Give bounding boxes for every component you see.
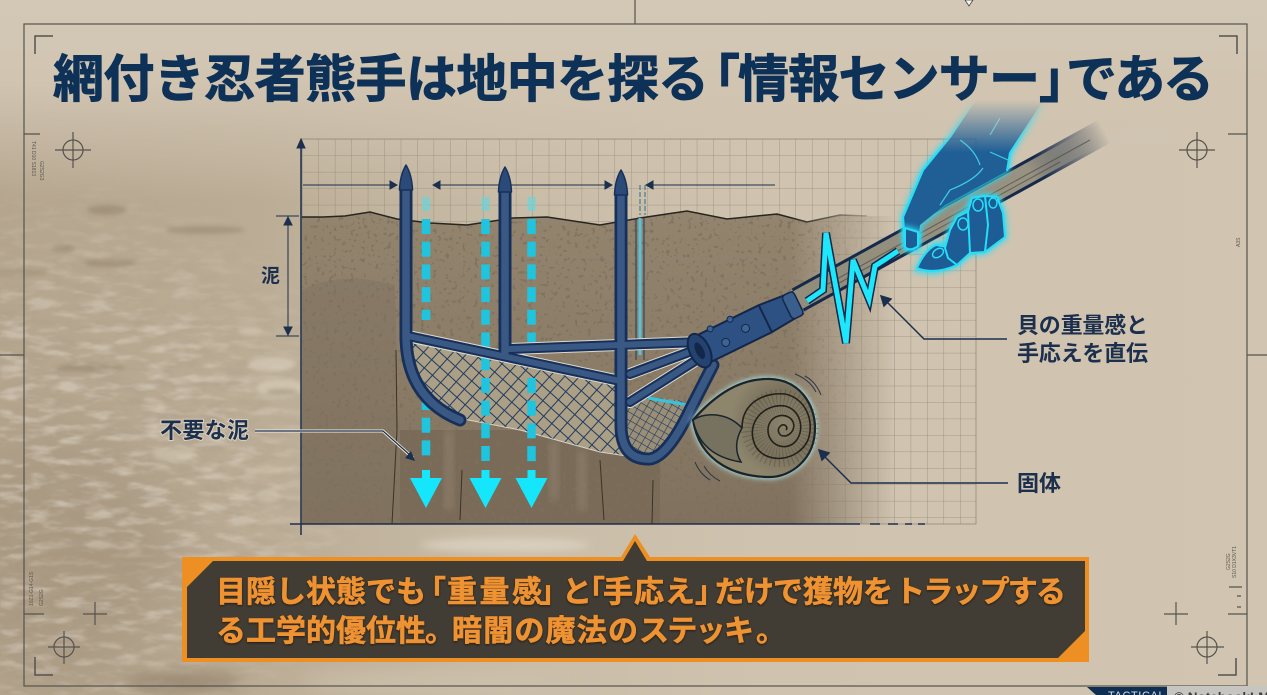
callout panel: 」 <box>695 576 725 609</box>
callout panel: ステッキ <box>639 615 754 648</box>
label: solid: 固体 <box>1017 471 1061 496</box>
callout panel <box>182 534 1089 662</box>
icon: vibration zigzag <box>807 233 898 343</box>
dimension arrows <box>303 181 775 189</box>
grid background <box>302 139 976 524</box>
icon: mouse cursor <box>965 0 973 6</box>
label: mud: 泥 <box>261 265 280 287</box>
label: unnecessary mud: 不要な泥 <box>160 418 249 443</box>
margin micro text: G2S2G <box>39 589 45 606</box>
callout panel: 目隠し状態でも <box>216 576 426 609</box>
icon: snail shell <box>693 374 821 481</box>
collar joint <box>683 286 806 371</box>
callout panel: と <box>562 576 592 609</box>
label: weight feel and response: 手応えを直伝 <box>1017 341 1148 366</box>
net <box>408 342 690 458</box>
label: weight feel and response: 貝の重量感と <box>1017 313 1148 338</box>
callout panel: 「 <box>416 576 446 609</box>
label: weight feel and response <box>1017 313 1148 366</box>
sensing arrows: dashed cyan <box>410 185 645 508</box>
mud cross-section <box>302 211 902 524</box>
thumb glow <box>905 228 918 249</box>
callout panel: だけで <box>715 576 803 609</box>
callout panel: 重量感 <box>447 576 542 609</box>
axes <box>290 139 925 535</box>
margin micro text: G2S2G <box>1226 553 1232 570</box>
callout panel: トラップする <box>895 576 1066 609</box>
title: 」 <box>1039 51 1090 108</box>
footer badge <box>1087 686 1267 695</box>
callout panel: 。 <box>756 615 786 648</box>
margin micro text: A3S <box>1236 237 1242 247</box>
hand back and wrist <box>903 92 1045 250</box>
title: 「 <box>689 51 740 108</box>
margin micro text: G2S2G3 <box>38 161 44 181</box>
title <box>53 51 1214 108</box>
background: sandy mud photo <box>0 117 576 695</box>
icon: glowing hand gripping handle <box>903 92 1045 272</box>
mud depth bracket <box>276 216 299 336</box>
margin micro text: S10 D1X3VT1 <box>1232 546 1238 578</box>
diagram: cross-section of tool in mud <box>160 92 1148 535</box>
crosshair: top left <box>55 132 91 168</box>
margin micro text: 10Z1-G14-G1S <box>29 571 35 606</box>
handle <box>798 131 1105 300</box>
title: である <box>1066 51 1214 108</box>
callout panel: 手応え <box>603 576 695 609</box>
callout leader: solid <box>819 450 1008 483</box>
callout panel: 暗闇の魔法の <box>452 615 638 648</box>
callout panel: 「 <box>575 576 605 609</box>
rake frame: tines and bars <box>400 165 713 459</box>
plus marks <box>83 602 1188 625</box>
crosshair: top right <box>1179 132 1215 168</box>
margin micro text: T41 D10 S1813 <box>30 141 36 176</box>
callout panel: る工学的優位性 <box>216 615 426 648</box>
crosshair: bottom left <box>48 631 80 664</box>
callout panel: 」 <box>539 576 569 609</box>
margin micro text <box>29 141 1242 606</box>
title: 情報センサー <box>738 51 1040 108</box>
callout panel: 。 <box>425 615 455 648</box>
callout leader: unnecessary mud <box>255 431 415 461</box>
title: 網付き忍者熊手は地中を探る <box>53 51 709 108</box>
fingers <box>905 196 1005 271</box>
fingers glow <box>917 196 1005 272</box>
crosshair: bottom right <box>1191 631 1224 664</box>
callout panel: 獲物を <box>803 576 893 609</box>
callout leader: weight feel <box>881 296 1007 339</box>
